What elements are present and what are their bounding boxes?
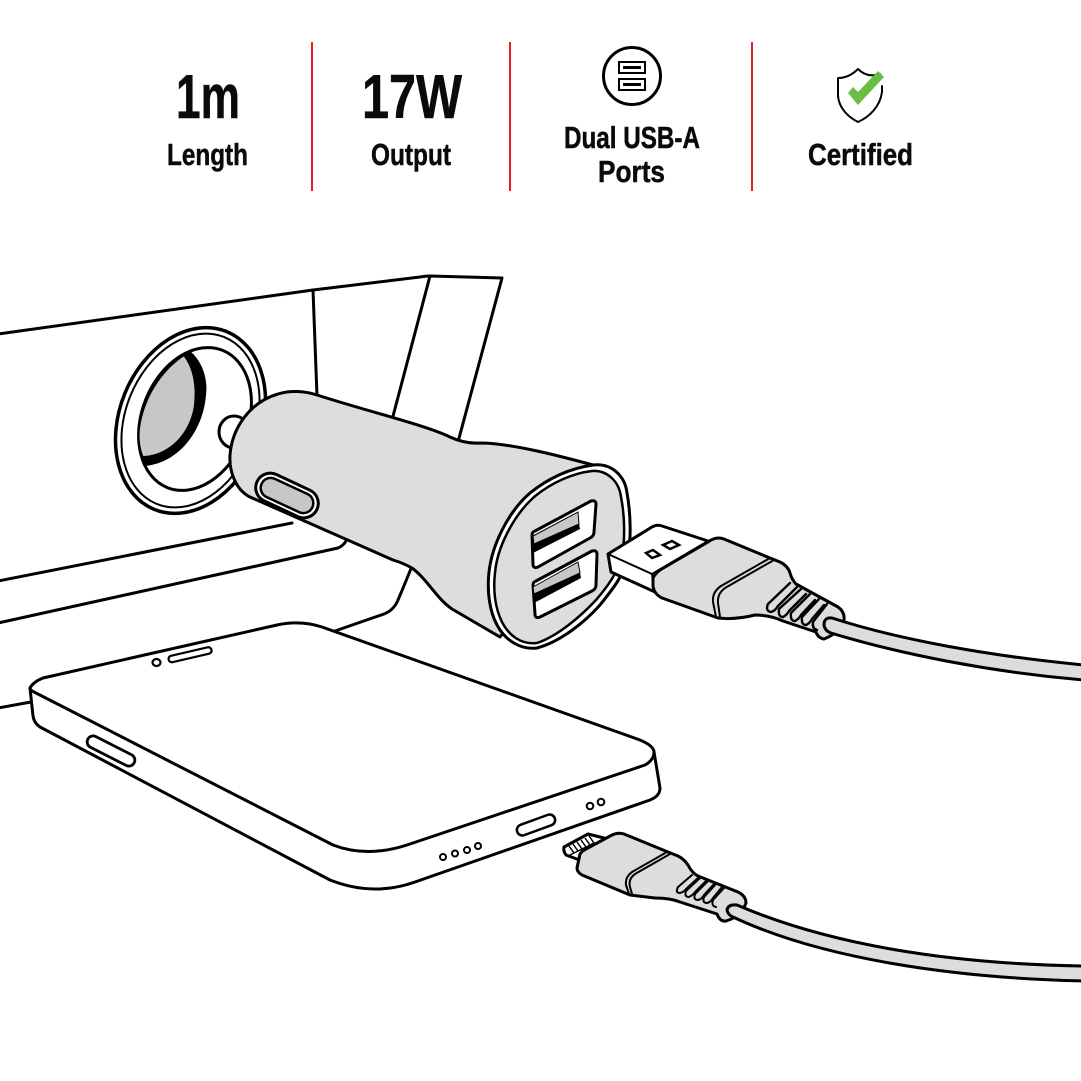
phone speaker (168, 647, 212, 663)
phone speaker holes left (440, 843, 481, 860)
Lightning tip (564, 834, 604, 862)
spec: dual USB-A ports (564, 48, 700, 189)
socket lens (139, 355, 196, 458)
spec: certified (808, 69, 913, 172)
spec: dual USB-A ports: Ports (598, 154, 665, 189)
icon: shield with check (838, 69, 884, 122)
spec: length (167, 63, 248, 172)
upper USB port (532, 501, 596, 568)
cigarette lighter socket (89, 305, 292, 536)
car charger body (230, 391, 630, 648)
Lightning connector housing (577, 833, 746, 921)
USB-A connector housing (653, 538, 844, 639)
lower USB port (533, 551, 597, 618)
spec: dual USB-A ports: Dual USB-A (564, 120, 700, 155)
spec: length: 1m (176, 63, 240, 132)
strain relief ribs (767, 583, 827, 630)
spec: output: Output (371, 137, 451, 172)
car dashboard (0, 276, 502, 708)
divider lines (311, 42, 753, 191)
smartphone (30, 623, 660, 889)
USB-A metal plug (608, 525, 708, 592)
Lightning cable end (564, 833, 1081, 981)
cable lower (727, 905, 1081, 981)
phone screen edge (30, 688, 654, 852)
strain relief ribs (677, 875, 724, 907)
phone speaker holes right (587, 799, 604, 809)
spec: length: Length (167, 137, 248, 172)
phone bottom port (515, 813, 557, 837)
cable upper (824, 618, 1081, 680)
socket inner stub (219, 416, 249, 448)
charger end-cap outline (488, 465, 630, 648)
spec: certified: Certified (808, 137, 913, 172)
phone side button (85, 734, 137, 768)
spec: output (362, 63, 462, 172)
spec: output: 17W (362, 63, 462, 132)
phone front camera (152, 659, 160, 666)
socket dark crescent (142, 351, 206, 466)
USB-A cable end (608, 525, 1081, 680)
charger side button (251, 468, 323, 523)
icon: USB ports (604, 48, 660, 104)
charger end-cap inner outline (494, 471, 624, 643)
